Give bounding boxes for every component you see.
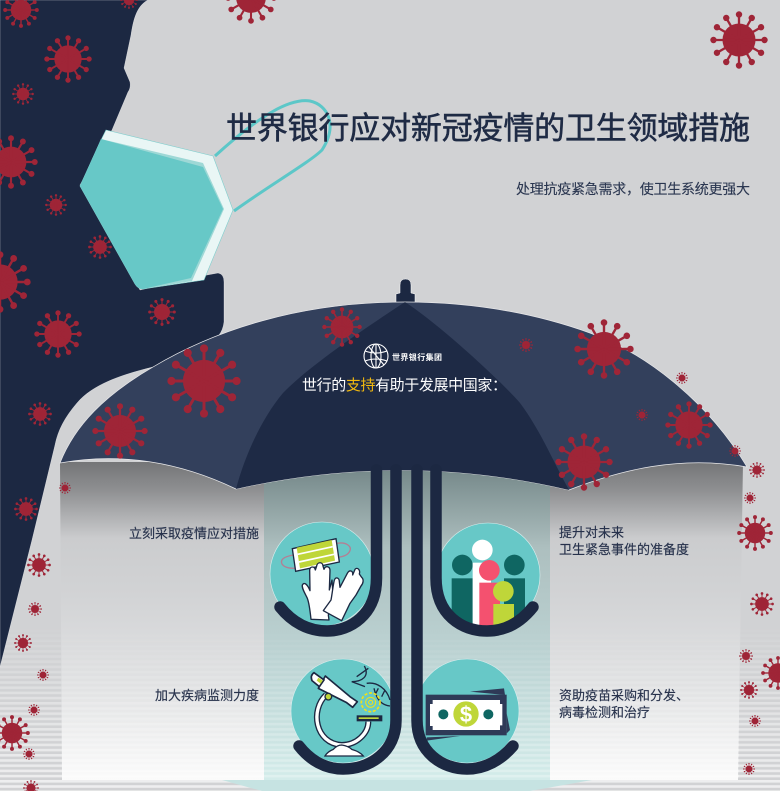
umbrella <box>60 279 747 491</box>
umbrella handles <box>280 470 533 769</box>
label: preparedness: 提升对未来 <box>559 525 624 540</box>
bottom teal wedge <box>222 780 592 791</box>
label: preparedness <box>559 525 689 557</box>
icon: microscope and DNA <box>311 666 390 756</box>
label: surveillance: 加大疾病监测力度 <box>155 688 259 703</box>
mask ear straps <box>215 101 330 211</box>
microscope tube <box>318 676 357 707</box>
icon: mask and gloves <box>281 539 363 621</box>
label: preparedness: 卫生紧急事件的准备度 <box>559 542 689 557</box>
World Bank Group logo <box>364 344 442 368</box>
subtitle: 处理抗疫紧急需求，使卫生系统更强大 <box>516 181 750 197</box>
umbrella finial <box>396 279 415 303</box>
label: vaccines: 资助疫苗采购和分发、 <box>559 688 689 703</box>
umbrella centre panel <box>236 302 569 490</box>
glove left <box>302 563 333 620</box>
yellow virus <box>361 693 380 712</box>
microscope arm <box>317 695 368 745</box>
mask teal front <box>80 139 223 289</box>
umbrella viruses <box>92 307 741 491</box>
umbrella slogan: 世行的支持有助于发展中国家： <box>302 377 507 394</box>
label: vaccines: 病毒检测和治疗 <box>559 705 650 720</box>
label: immediate response: 立刻采取疫情应对措施 <box>129 526 259 541</box>
mask teal inner fold <box>80 139 224 289</box>
mask body <box>80 130 233 289</box>
microscope stage <box>357 715 382 721</box>
lower white panel <box>60 462 743 780</box>
logo wordmark: 世界银行集团 <box>392 352 442 362</box>
title: 世界银行应对新冠疫情的卫生领域措施 <box>226 111 750 146</box>
label: vaccines <box>559 688 689 720</box>
background stripes <box>0 666 780 791</box>
icon: people <box>452 540 525 629</box>
central teal column <box>264 470 550 780</box>
DNA strand <box>352 666 390 706</box>
icon circles <box>270 522 540 763</box>
umbrella canopy <box>60 302 747 490</box>
face mask <box>80 101 330 289</box>
glove right <box>323 568 363 621</box>
icon: dollar bill <box>426 688 510 741</box>
icon: dollar bill: $ <box>460 702 472 727</box>
surgical mask <box>292 539 339 571</box>
mask loops <box>281 543 350 568</box>
globe icon <box>364 344 388 368</box>
person silhouette <box>0 0 224 667</box>
microscope base <box>325 745 363 756</box>
